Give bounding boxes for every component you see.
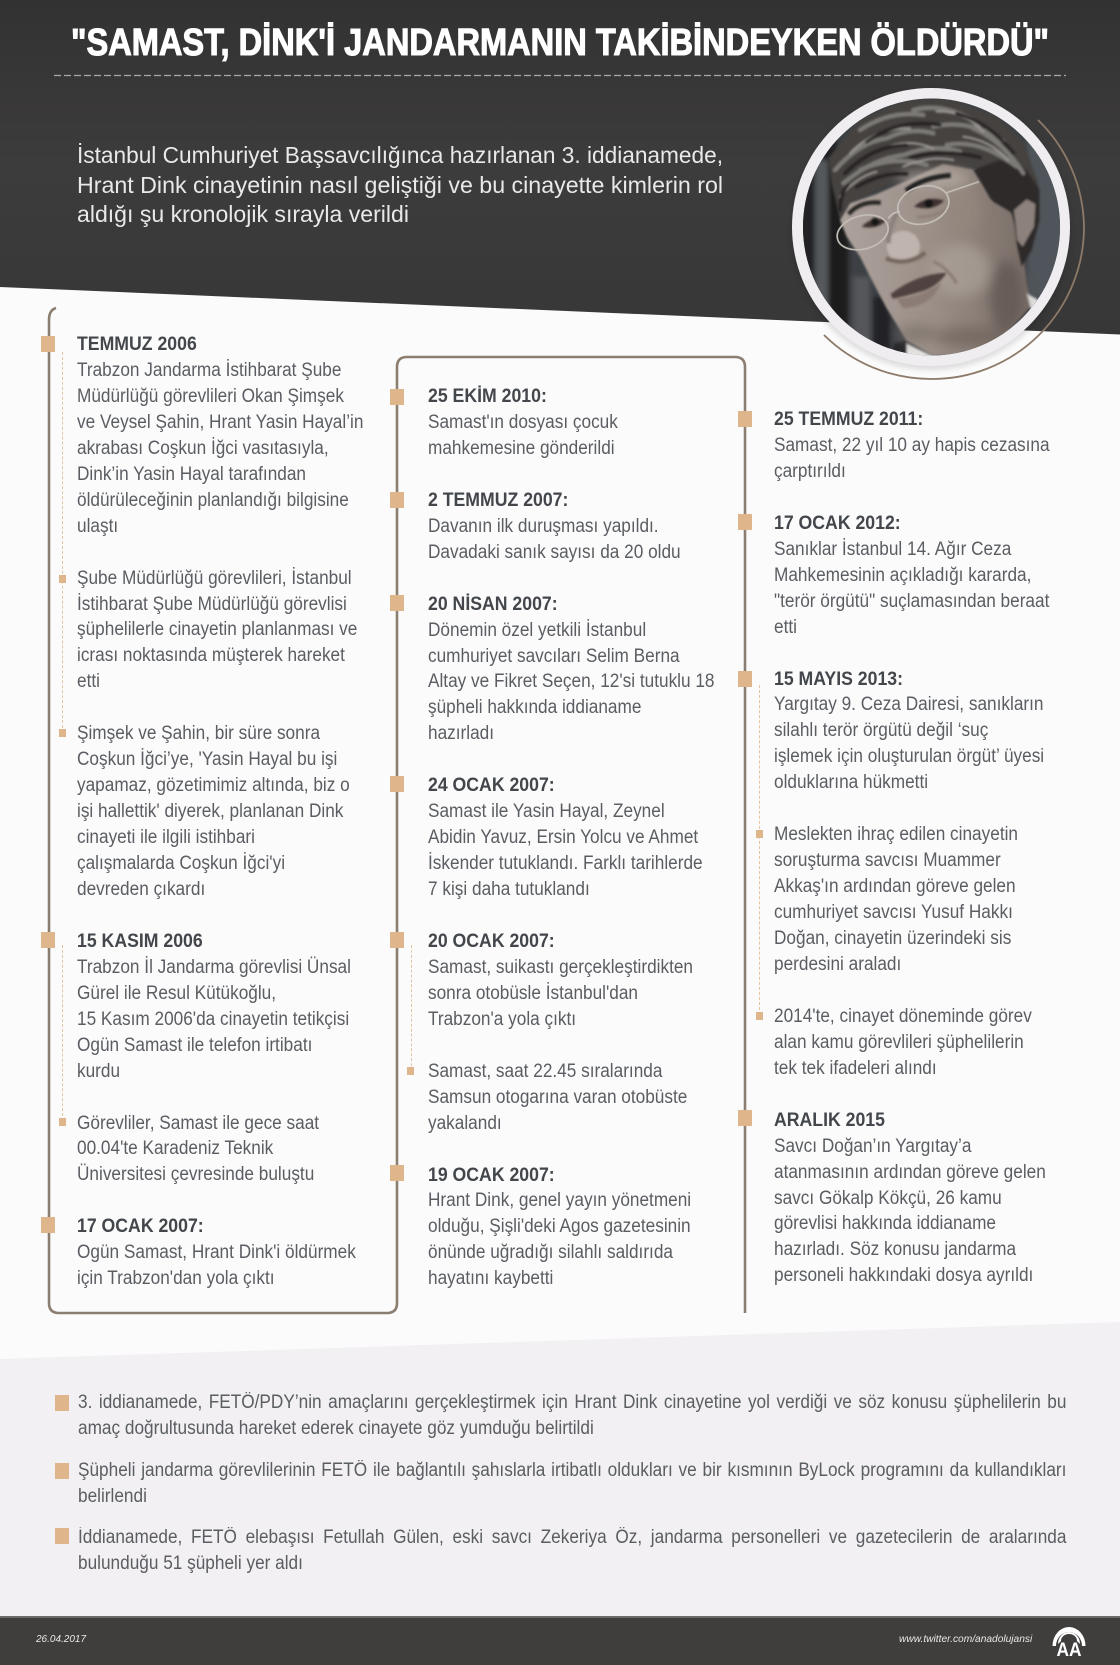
15 KASIM 2006: Ogün Samast ile telefon irtibatı	[77, 1035, 312, 1056]
note: Meslekten ihraç: cumhuriyet savcısı Yusuf Hakkı	[774, 902, 1013, 923]
intro text: İstanbul Cumhuriyet Başsavcılığınca hazırlanan 3. iddianamede,	[77, 142, 723, 168]
20 NİSAN 2007: hazırladı	[428, 723, 494, 744]
portrait of Hrant Dink	[792, 88, 1085, 380]
ARALIK 2015: savcı Gökalp Kökçü, 26 kamu	[774, 1188, 1002, 1209]
face	[840, 164, 1038, 357]
note: Şimşek ve Şahin: Şimşek ve Şahin, bir süre sonra	[77, 723, 320, 744]
19 OCAK 2007: 19 OCAK 2007:	[428, 1164, 555, 1186]
17 OCAK 2012: 17 OCAK 2012:	[774, 512, 901, 534]
intro text: Hrant Dink cinayetinin nasıl geliştiği ve bu cinayette kimlerin rol	[77, 172, 723, 198]
bottom notes panel	[55, 1392, 1066, 1574]
note: Samsun otogarı	[428, 1061, 687, 1134]
icon: AA logo	[1052, 1627, 1086, 1660]
20 OCAK 2007: Trabzon'a yola çıktı	[428, 1009, 576, 1030]
note 1: amaç doğrultusunda hareket ederek cinayete göz yumduğu belirtildi	[78, 1418, 594, 1439]
bullet marker 2	[55, 1463, 69, 1479]
twitter url: www.twitter.com/anadolujansi	[899, 1634, 1032, 1645]
note: Samsun otogarı: Samast, saat 22.45 sıralarında	[428, 1061, 662, 1082]
15 KASIM 2006: Gürel ile Resul Kütükoğlu,	[77, 983, 276, 1004]
25 TEMMUZ 2011: Samast, 22 yıl 10 ay hapis cezasına	[774, 435, 1050, 456]
15 MAYIS 2013: işlemek için oluşturulan örgüt’ üyesi	[774, 746, 1044, 767]
ARALIK 2015	[774, 1109, 1046, 1286]
15 KASIM 2006: 15 KASIM 2006	[77, 930, 203, 952]
note: Şimşek ve Şahin: işi hallettik' diyerek, planlanan Dink	[77, 801, 343, 822]
note: Şube Müdürlüğü	[77, 567, 357, 692]
note 2: Şüpheli jandarma görevlilerinin FETÖ ile bağlantılı şahıslarla irtibatlı oldukları ve bir kısmının ByLock programını da kullandıkları	[78, 1460, 1066, 1481]
17 OCAK 2007: 17 OCAK 2007:	[77, 1215, 204, 1237]
note: 2014	[774, 1006, 1032, 1079]
ARALIK 2015: Savcı Doğan’ın Yargıtay’a	[774, 1136, 971, 1157]
note: Görevliler: Görevliler, Samast ile gece saat	[77, 1113, 319, 1134]
17 OCAK 2012: etti	[774, 617, 797, 638]
bullet marker 1	[55, 1395, 69, 1411]
background	[803, 98, 1060, 356]
ARALIK 2015: görevlisi hakkında iddianame	[774, 1213, 996, 1234]
19 OCAK 2007: Hrant Dink, genel yayın yönetmeni	[428, 1190, 691, 1211]
note: Samsun otogarı: yakalandı	[428, 1113, 502, 1134]
ARALIK 2015: atanmasının ardından göreve gelen	[774, 1162, 1046, 1183]
15 MAYIS 2013: 15 MAYIS 2013:	[774, 668, 903, 690]
25 EKİM 2010: 25 EKİM 2010:	[428, 385, 547, 407]
20 NİSAN 2007: Altay ve Fikret Seçen, 12'si tutuklu 18	[428, 671, 715, 692]
facial shading	[897, 171, 1023, 347]
24 OCAK 2007: 24 OCAK 2007:	[428, 774, 555, 796]
24 OCAK 2007: Abidin Yavuz, Ersin Yolcu ve Ahmet	[428, 827, 698, 848]
15 MAYIS 2013: olduklarına hükmetti	[774, 772, 928, 793]
ARALIK 2015: hazırladı. Söz konusu jandarma	[774, 1239, 1016, 1260]
note: Şimşek ve Şahin: Coşkun İğci’ye, 'Yasin Hayal bu işi	[77, 749, 337, 770]
column 1: 2006 events	[77, 333, 363, 1289]
note: Meslekten ihraç	[774, 824, 1018, 975]
note: 2014: tek tek ifadeleri alındı	[774, 1058, 937, 1079]
15 KASIM 2006	[77, 930, 351, 1082]
19 OCAK 2007: olduğu, Şişli'deki Agos gazetesinin	[428, 1216, 691, 1237]
note: Samsun otogarı: Samsun otogarına varan otobüste	[428, 1087, 687, 1108]
glasses	[833, 180, 979, 255]
note 2: belirlendi	[78, 1486, 147, 1507]
note: 2014: 2014'te, cinayet döneminde görev	[774, 1006, 1032, 1027]
note: 2014: alan kamu görevlileri şüphelilerin	[774, 1032, 1024, 1053]
17 OCAK 2007: için Trabzon'dan yola çıktı	[77, 1268, 275, 1289]
note: Meslekten ihraç: perdesini araladı	[774, 954, 901, 975]
24 OCAK 2007: İskender tutuklandı. Farklı tarihlerde	[428, 853, 703, 874]
25 EKİM 2010	[428, 385, 618, 459]
footer bar	[0, 1616, 1120, 1665]
15 KASIM 2006: kurdu	[77, 1061, 120, 1082]
note: Meslekten ihraç: Meslekten ihraç edilen cinayetin	[774, 824, 1018, 845]
20 NİSAN 2007: Dönemin özel yetkili İstanbul	[428, 620, 646, 641]
17 OCAK 2007	[77, 1215, 356, 1289]
TEMMUZ 2006: Müdürlüğü görevlileri Okan Şimşek	[77, 386, 344, 407]
note: Görevliler: 00.04'te Karadeniz Teknik	[77, 1138, 273, 1159]
TEMMUZ 2006	[77, 333, 363, 568]
ARALIK 2015: ARALIK 2015	[774, 1109, 885, 1131]
note: Şube Müdürlüğü: şüphelilerle cinayetin planlanması ve	[77, 619, 357, 640]
hair base	[828, 98, 1039, 219]
25 TEMMUZ 2011	[774, 408, 1050, 482]
2 TEMMUZ 2007: 2 TEMMUZ 2007:	[428, 489, 568, 511]
17 OCAK 2012: Mahkemesinin açıkladığı kararda,	[774, 565, 1031, 586]
bullet marker 3	[55, 1528, 69, 1544]
TEMMUZ 2006: TEMMUZ 2006	[77, 333, 197, 355]
25 TEMMUZ 2011: 25 TEMMUZ 2011:	[774, 408, 923, 430]
20 NİSAN 2007	[428, 593, 715, 744]
note: Şimşek ve Şahin: cinayeti ile ilgili istihbari	[77, 827, 255, 848]
note: Görevliler: Üniversitesi çevresinde buluştu	[77, 1164, 314, 1185]
20 NİSAN 2007: şüpheli hakkında iddianame	[428, 697, 641, 718]
20 OCAK 2007: 20 OCAK 2007:	[428, 930, 555, 952]
TEMMUZ 2006: öldürüleceğinin planlandığı bilgisine	[77, 490, 349, 511]
TEMMUZ 2006: akrabası Coşkun İğci vasıtasıyla,	[77, 438, 329, 459]
15 KASIM 2006: Trabzon İl Jandarma görevlisi Ünsal	[77, 957, 351, 978]
2 TEMMUZ 2007	[428, 489, 681, 563]
20 OCAK 2007: sonra otobüsle İstanbul'dan	[428, 983, 638, 1004]
25 EKİM 2010: Samast'ın dosyası çocuk	[428, 412, 618, 433]
19 OCAK 2007	[428, 1164, 691, 1289]
intro text	[77, 142, 723, 227]
TEMMUZ 2006: ve Veysel Şahin, Hrant Yasin Hayal’in	[77, 412, 363, 433]
TEMMUZ 2006: Trabzon Jandarma İstihbarat Şube	[77, 360, 341, 381]
2 TEMMUZ 2007: Davadaki sanık sayısı da 20 oldu	[428, 542, 681, 563]
intro text: aldığı şu kronolojik sırayla verildi	[77, 201, 409, 227]
20 NİSAN 2007: 20 NİSAN 2007:	[428, 593, 558, 615]
TEMMUZ 2006: ulaştı	[77, 516, 118, 537]
note: Şimşek ve Şahin: yapamaz, gözetimimiz altında, biz o	[77, 775, 350, 796]
24 OCAK 2007: Samast ile Yasin Hayal, Zeynel	[428, 801, 665, 822]
note: Şube Müdürlüğü: icrası noktasında müşterek hareket	[77, 645, 345, 666]
date: 26.04.2017	[36, 1634, 86, 1645]
20 OCAK 2007: Samast, suikastı gerçekleştirdikten	[428, 957, 693, 978]
15 KASIM 2006: 15 Kasım 2006'da cinayetin tetikçisi	[77, 1009, 349, 1030]
ARALIK 2015: personeli hakkındaki dosya ayrıldı	[774, 1265, 1033, 1286]
17 OCAK 2012: Sanıklar İstanbul 14. Ağır Ceza	[774, 539, 1011, 560]
15 MAYIS 2013: Yargıtay 9. Ceza Dairesi, sanıkların	[774, 694, 1043, 715]
20 OCAK 2007	[428, 930, 693, 1030]
note: Şube Müdürlüğü: Şube Müdürlüğü görevlileri, İstanbul	[77, 568, 352, 589]
19 OCAK 2007: önünde uğradığı silahlı saldırıda	[428, 1242, 673, 1263]
hair strands	[835, 108, 1023, 210]
note: Şube Müdürlüğü: İstihbarat Şube Müdürlüğü görevlisi	[77, 594, 347, 615]
eyes	[862, 219, 886, 228]
column 3: 2011 to 2015 events	[774, 408, 1050, 1286]
TEMMUZ 2006: Dink’in Yasin Hayal tarafından	[77, 464, 306, 485]
eyebrows	[906, 175, 951, 191]
25 TEMMUZ 2011: çarptırıldı	[774, 461, 846, 482]
note: Şimşek ve Şahin: devreden çıkardı	[77, 879, 205, 900]
column 2: 2010 to 2007 events	[428, 385, 715, 1289]
note 1: 3. iddianamede, FETÖ/PDY’nin amaçlarını gerçekleştirmek için Hrant Dink cinayetine yol verdiği ve söz konusu şüphelilerin bu	[78, 1392, 1066, 1413]
15 MAYIS 2013	[774, 668, 1044, 793]
17 OCAK 2007: Ogün Samast, Hrant Dink'i öldürmek	[77, 1242, 356, 1263]
note: Meslekten ihraç: soruşturma savcısı Muammer	[774, 850, 1001, 871]
17 OCAK 2012: "terör örgütü" suçlamasından beraat	[774, 591, 1049, 612]
note: Meslekten ihraç: Doğan, cinayetin üzerindeki sis	[774, 928, 1011, 949]
17 OCAK 2012	[774, 512, 1050, 638]
note 1	[78, 1392, 1066, 1439]
side hair and ear	[973, 160, 1039, 267]
note: Şimşek ve Şahin: çalışmalarda Coşkun İğci'yi	[77, 853, 285, 874]
note 3	[78, 1527, 1066, 1574]
note: Şube Müdürlüğü: etti	[77, 671, 100, 692]
2 TEMMUZ 2007: Davanın ilk duruşması yapıldı.	[428, 516, 659, 537]
mouth	[891, 273, 947, 299]
nose	[887, 231, 920, 263]
20 NİSAN 2007: cumhuriyet savcıları Selim Berna	[428, 646, 680, 666]
note: Şimşek ve Şahin	[77, 723, 350, 900]
15 MAYIS 2013: silahlı terör örgütü değil ‘suç	[774, 720, 988, 741]
note: Meslekten ihraç: Akkaş'ın ardından göreve gelen	[774, 876, 1016, 897]
25 EKİM 2010: mahkemesine gönderildi	[428, 438, 615, 459]
24 OCAK 2007: 7 kişi daha tutuklandı	[428, 879, 590, 900]
note 3: İddianamede, FETÖ elebaşısı Fetullah Gülen, eski savcı Zekeriya Öz, jandarma personelleri ve gazetecilerin de aralarında	[78, 1527, 1066, 1548]
19 OCAK 2007: hayatını kaybetti	[428, 1268, 553, 1289]
note 3: bulunduğu 51 şüpheli yer aldı	[78, 1553, 303, 1574]
24 OCAK 2007	[428, 774, 703, 900]
note 2	[78, 1460, 1066, 1507]
note: Görevliler	[77, 1113, 319, 1185]
